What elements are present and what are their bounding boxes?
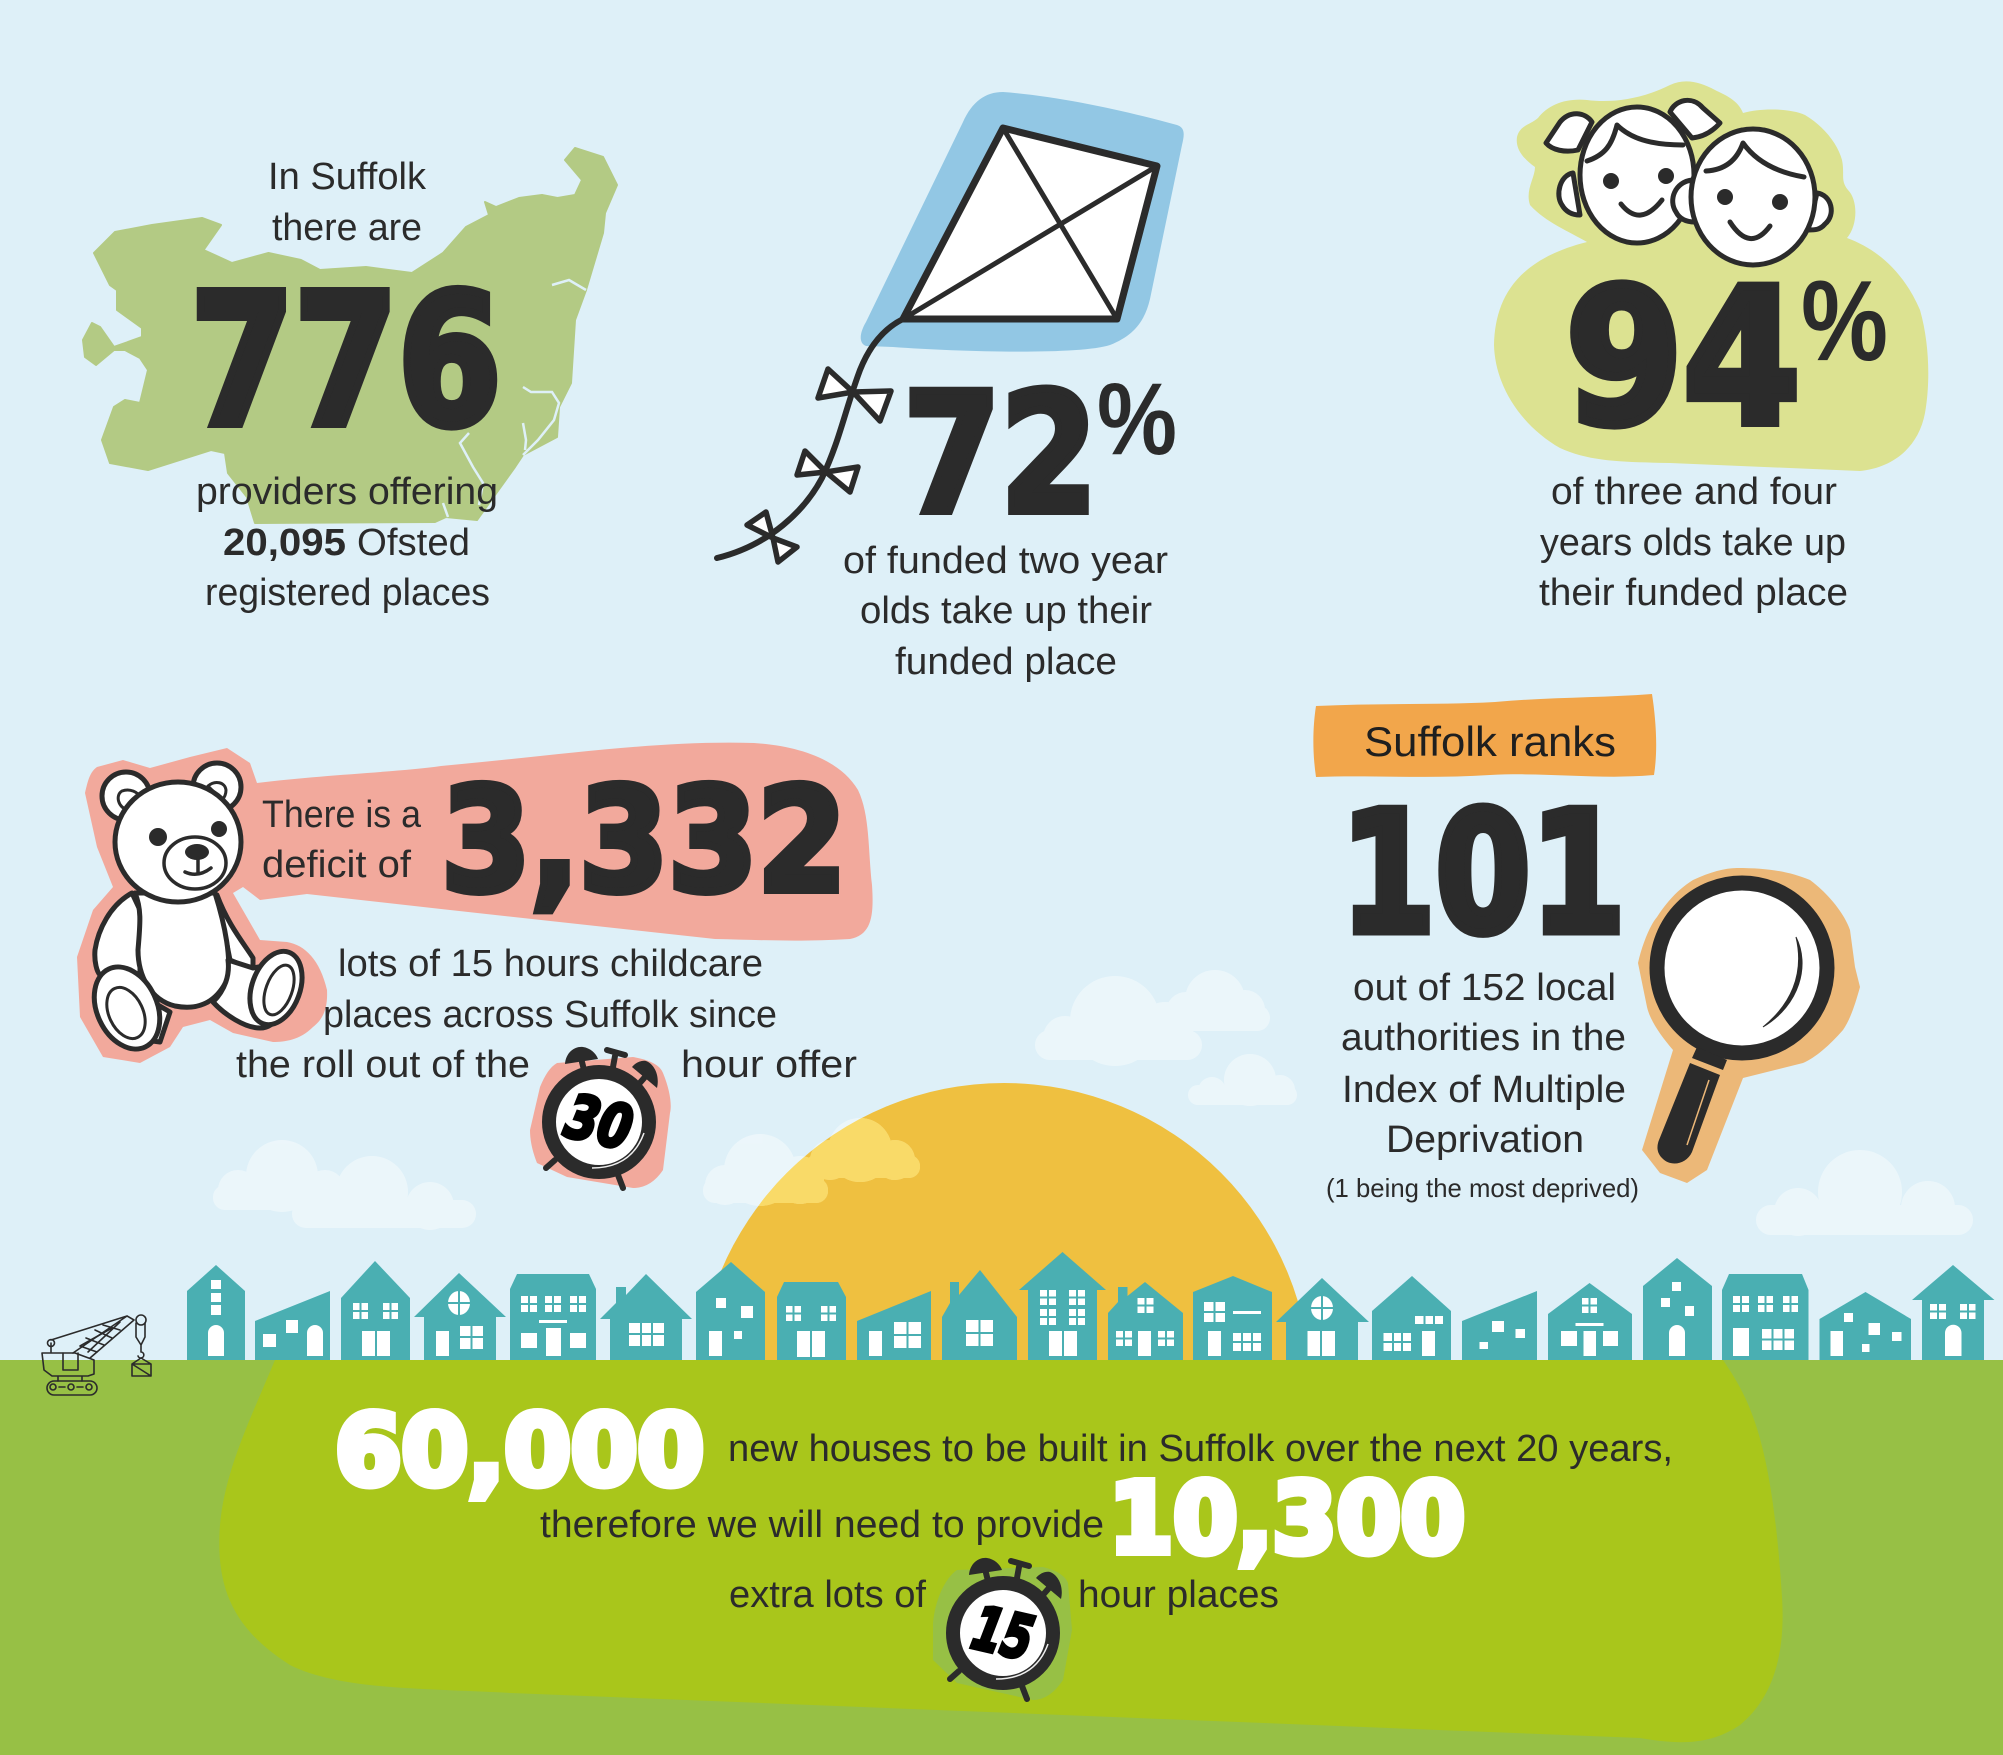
text: of funded two year olds take up their funded place	[843, 540, 1168, 683]
icon: clock 15: 15	[966, 1593, 1040, 1675]
icon: crane	[42, 1315, 151, 1395]
number: 101: 101	[1340, 777, 1626, 971]
number: 94%: %	[1801, 258, 1888, 385]
text: hour places: hour places	[1078, 1574, 1279, 1616]
text: In Suffolk there are: there are	[272, 207, 422, 249]
icon: kite	[717, 128, 1157, 562]
number: 72%: %	[1097, 362, 1177, 476]
map rivers	[443, 280, 586, 517]
text: Suffolk ranks: Suffolk ranks	[1364, 718, 1616, 765]
house 11	[1019, 1252, 1106, 1360]
text: lots of 15 hours childcare places across Suffolk since: the roll out of the	[236, 1044, 530, 1086]
text: of three and four years olds take up their funded place	[1539, 471, 1848, 614]
text: of funded two year olds take up their funded place: of funded two year	[843, 540, 1168, 582]
map of Suffolk	[83, 148, 617, 523]
green ground blob	[219, 1360, 1783, 1742]
panel: two year olds	[717, 92, 1184, 683]
text: lots of 15 hours childcare places across Suffolk since: hour offer	[681, 1044, 857, 1086]
icon: clock 30	[530, 1047, 671, 1188]
text: providers offering 20,095 Ofsted registered places: 20,095	[223, 522, 346, 564]
orange label	[1313, 694, 1656, 777]
house 5	[510, 1274, 596, 1360]
house 8	[777, 1282, 846, 1360]
text: new houses to be built: new houses to be built in Suffolk over the next 20 years,	[728, 1428, 1673, 1470]
text: lots of 15 hours childcare places across Suffolk since: lots of 15 hours childcare	[338, 943, 763, 985]
text: providers offering 20,095 Ofsted registered places	[196, 471, 498, 614]
number: 3,332: 3,332	[442, 757, 846, 924]
text: therefore we will need to provide: therefore we will need to provide	[540, 1504, 1104, 1546]
house 13	[1193, 1276, 1272, 1360]
number: 776: 776	[190, 256, 502, 466]
panel: Suffolk ranks	[1313, 694, 1860, 1203]
text: In Suffolk there are	[268, 156, 427, 249]
ground	[0, 1360, 2003, 1755]
text: lots of 15 hours childcare places across Suffolk since	[236, 943, 857, 1086]
house 9	[857, 1291, 931, 1360]
house 19	[1722, 1274, 1808, 1360]
house 18	[1643, 1258, 1712, 1360]
text: footnote: (1 being the most deprived)	[1326, 1173, 1639, 1203]
text: out of 152 local authorities: Index of Multiple	[1342, 1069, 1626, 1111]
house 7	[696, 1262, 765, 1360]
number: 60,000: 60,000	[335, 1394, 704, 1507]
number: 94%: 94	[1566, 250, 1800, 468]
text: of three and four years olds take up their funded place: their funded place	[1539, 572, 1848, 614]
house 2	[255, 1291, 330, 1360]
text: providers offering 20,095 Ofsted registered places: registered places	[205, 572, 490, 614]
text: of funded two year olds take up their funded place: olds take up their	[860, 590, 1152, 632]
text: In Suffolk there are: In Suffolk	[268, 156, 427, 198]
sun	[697, 1083, 1311, 1697]
panel: deficit	[77, 743, 873, 1188]
number: 10,300: 10,300	[1109, 1462, 1465, 1575]
text: There is a deficit of: There is a	[262, 794, 422, 836]
text: of funded two year olds take up their funded place: funded place	[895, 641, 1117, 683]
icon: children faces	[1546, 100, 1831, 265]
text: lots of 15 hours childcare places across Suffolk since: places across Suffolk since	[323, 994, 777, 1036]
icon: clock 30: 30	[559, 1081, 639, 1165]
house 20	[1820, 1292, 1911, 1360]
house 1	[187, 1265, 245, 1360]
house 10	[942, 1270, 1017, 1360]
house 16	[1462, 1291, 1537, 1360]
clouds where they overlap the sun	[758, 1118, 920, 1206]
panel: three and four year olds	[1494, 81, 1928, 614]
icon: magnifying glass	[1638, 868, 1860, 1183]
text: out of 152 local authorities: authorities in the	[1341, 1017, 1626, 1059]
row of houses	[187, 1252, 1994, 1360]
text: extra lots of: extra lots of	[729, 1574, 926, 1616]
house 3	[341, 1261, 410, 1360]
icon: teddy bear	[82, 763, 312, 1060]
text: out of 152 local authorities	[1341, 967, 1626, 1161]
text: providers offering 20,095 Ofsted registered places: providers offering	[196, 471, 498, 513]
clouds	[213, 970, 1973, 1236]
text: out of 152 local authorities: Deprivation	[1386, 1119, 1584, 1161]
green blob	[1494, 81, 1928, 471]
icon: clock 15	[933, 1558, 1072, 1700]
house 4	[414, 1273, 506, 1360]
house 15	[1372, 1276, 1451, 1360]
house 14	[1276, 1278, 1369, 1360]
text: of three and four years olds take up their funded place: years olds take up	[1540, 522, 1846, 564]
house 12	[1108, 1282, 1183, 1360]
text: out of 152 local authorities: out of 152 local	[1353, 967, 1616, 1009]
house 6	[600, 1274, 692, 1360]
house 21	[1912, 1265, 1994, 1360]
panel: providers	[83, 148, 617, 614]
text: of three and four years olds take up their funded place: of three and four	[1551, 471, 1837, 513]
number: 72%: 72	[904, 358, 1098, 550]
text: There is a deficit of: deficit of	[262, 844, 411, 886]
house 17	[1548, 1283, 1632, 1360]
pink blob	[77, 743, 873, 1063]
text: providers offering 20,095 Ofsted registered places: Ofsted	[357, 522, 470, 564]
panel: new houses	[335, 1394, 1673, 1700]
kite background	[861, 92, 1184, 352]
text: There is a deficit of	[262, 794, 422, 886]
